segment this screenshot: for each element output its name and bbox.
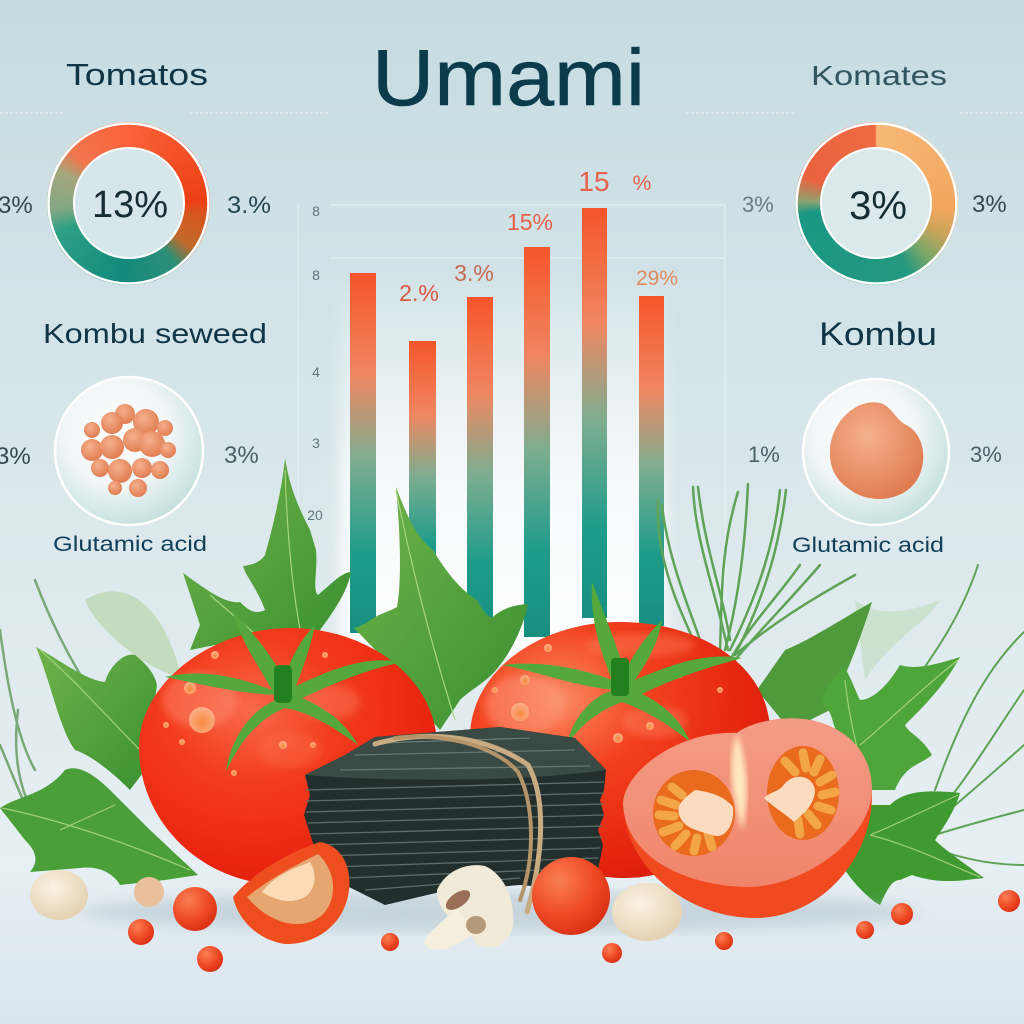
heading: kombu seweed: Kombu seweed	[43, 318, 267, 349]
mushroom	[425, 865, 513, 949]
axis labels	[307, 203, 323, 523]
axis labels: 4	[312, 364, 320, 380]
side label left: 3%	[742, 192, 774, 217]
label: glutamic acid: Glutamic acid	[792, 534, 944, 557]
tomato left	[139, 612, 437, 885]
side label left: 1%	[748, 442, 780, 467]
panel: komates donut	[742, 60, 1007, 285]
donut chart: komates: 3%	[849, 184, 907, 228]
halved tomato	[623, 718, 872, 918]
axis labels: 3	[312, 435, 320, 451]
calyx	[165, 612, 402, 772]
title: Umami	[372, 33, 645, 122]
panel: kombu	[748, 316, 1002, 557]
donut chart: tomatos: 13%	[92, 184, 168, 226]
side label right: 3%	[224, 442, 259, 469]
axis labels: 8	[312, 203, 320, 219]
bar value labels: 2.%	[399, 280, 439, 306]
leaf: right lower	[845, 791, 984, 905]
donut chart: tomatos	[47, 122, 210, 285]
bar value labels: 3.%	[454, 260, 494, 286]
bar value labels: 15	[578, 166, 610, 197]
panel: tomatos donut	[0, 57, 271, 285]
label: glutamic acid: Glutamic acid	[53, 533, 207, 556]
bar value labels: 29%	[636, 267, 678, 290]
seed chamber right	[764, 746, 839, 840]
foliage	[0, 458, 1024, 905]
leaf: left lower	[0, 768, 198, 885]
leaf: right middle	[822, 657, 960, 790]
twine	[375, 736, 541, 912]
bar value labels: 15%	[507, 209, 553, 235]
beans	[30, 870, 682, 941]
bar value labels: %	[633, 172, 651, 195]
side label right: 3.%	[227, 192, 271, 219]
tomato right	[470, 582, 770, 878]
water drops	[163, 651, 328, 776]
small halved tomato	[233, 842, 349, 944]
icon: glutamate cluster	[55, 377, 203, 525]
side label right: 3%	[970, 442, 1002, 467]
heading: kombu: Kombu	[819, 316, 937, 352]
side label right: 3%	[972, 191, 1007, 218]
leaf: top centre	[354, 487, 528, 730]
faded fern right	[855, 600, 940, 680]
axis labels: 8	[312, 267, 320, 283]
kombu stack	[304, 727, 606, 912]
bar chart	[0, 113, 1024, 660]
heading: komates: Komates	[811, 60, 947, 91]
donut chart: komates	[795, 122, 958, 285]
leaf: right upper	[757, 602, 872, 730]
panel: kombu seaweed	[0, 318, 267, 556]
leaf: top centre-left	[183, 458, 351, 650]
faded fern	[85, 591, 182, 680]
bars	[350, 208, 664, 637]
axis labels: 20	[307, 507, 323, 523]
small garnishes	[30, 842, 1020, 972]
bar value labels	[399, 166, 678, 306]
cherry tomato	[532, 857, 610, 935]
red balls	[128, 887, 1020, 972]
floor shadow	[80, 892, 920, 932]
grass stems	[0, 484, 1024, 865]
calyx	[502, 582, 742, 745]
water drops	[492, 644, 723, 743]
cut face	[623, 718, 872, 887]
heading: tomatos: Tomatos	[66, 57, 208, 92]
icon: glutamate drop	[803, 379, 949, 525]
leaf: left upper	[36, 647, 157, 790]
seed chamber left	[653, 770, 735, 856]
